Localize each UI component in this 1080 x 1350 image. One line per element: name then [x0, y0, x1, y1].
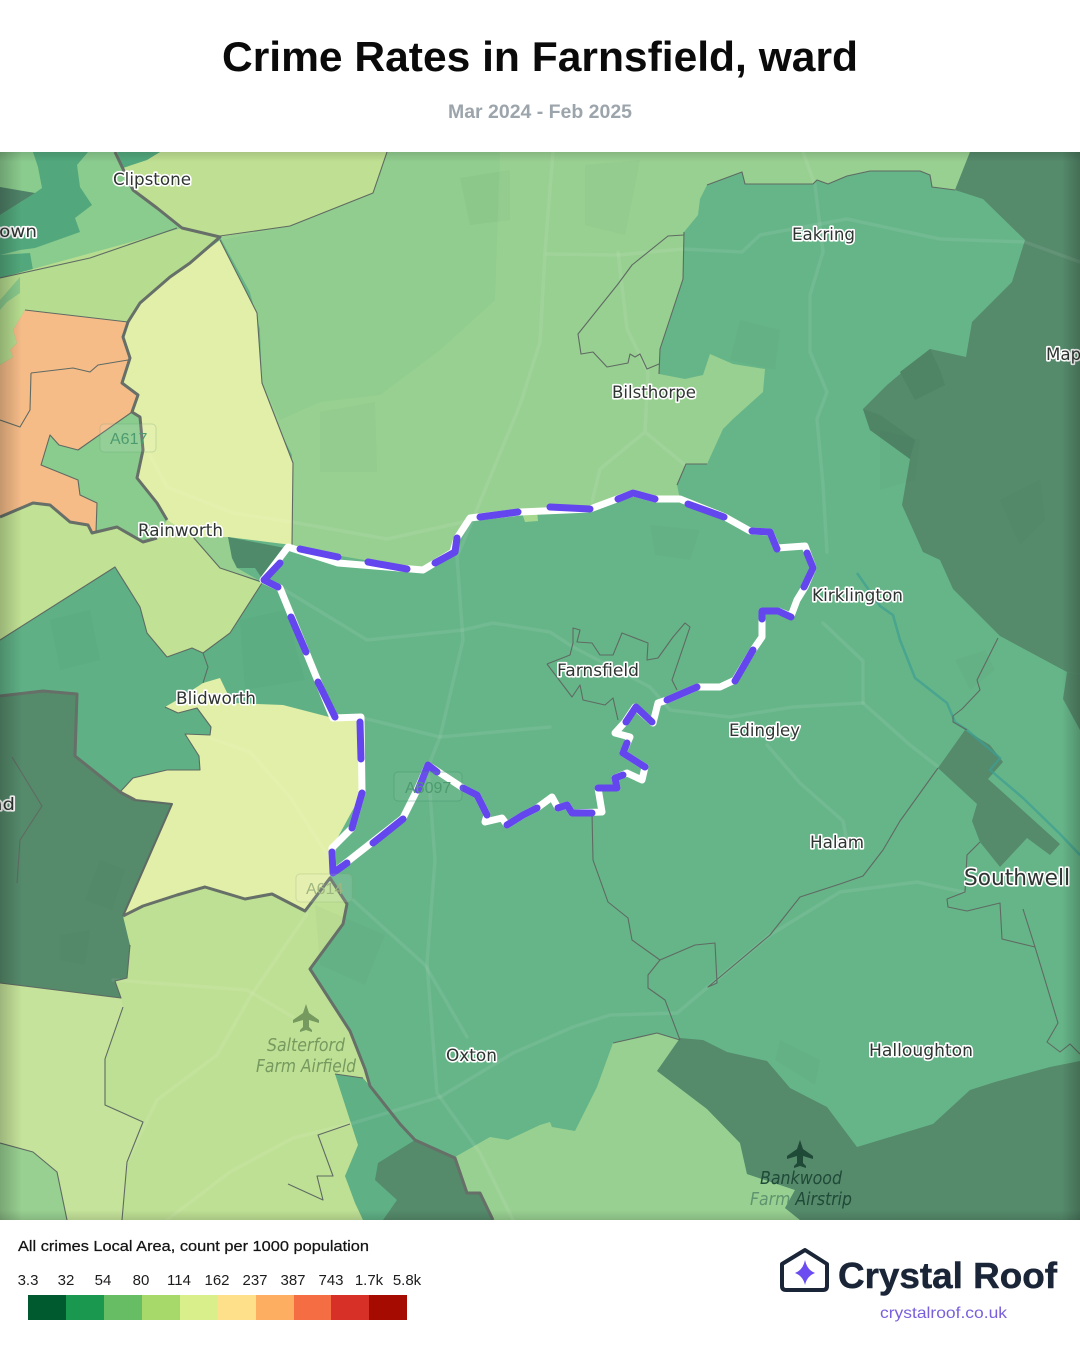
icon: house with star — [782, 1250, 827, 1290]
legend scale values — [18, 1272, 422, 1289]
small light plot on ward edge — [522, 514, 538, 522]
legend scale values: 387 — [280, 1272, 306, 1289]
place labels: Clipstone — [113, 170, 191, 190]
ward boundary: violet dashes — [264, 493, 813, 873]
place labels: Blidworth — [176, 689, 256, 709]
website URL: crystalroof.co.uk — [880, 1305, 1008, 1322]
place labels — [0, 170, 1080, 1066]
Crystal Roof logo — [782, 1250, 1058, 1322]
legend title: All crimes Local Area, count per 1000 population — [18, 1238, 369, 1255]
region: Clipstone yellow green — [115, 152, 387, 237]
region: green pocket beside A617 — [41, 412, 167, 542]
airfield label: Bankwood Farm Airstrip: Farm Airstrip — [750, 1189, 852, 1210]
region: south green wedge — [335, 1074, 399, 1220]
region: dark patch at Rainworth — [228, 537, 283, 577]
airfield label: Bankwood Farm Airstrip — [750, 1140, 852, 1210]
region: north central light green — [220, 152, 970, 570]
region: south central light green — [455, 1033, 800, 1220]
region: north-west dark triangle — [0, 187, 35, 215]
place labels: Rainworth — [138, 521, 223, 541]
place labels: Edingley — [729, 721, 800, 741]
region: south dark wedge — [375, 1140, 493, 1220]
legend scale values: 162 — [204, 1272, 230, 1289]
region: north-west green bands — [0, 152, 182, 278]
place labels: Eakring — [792, 225, 855, 245]
place labels: Oxton — [446, 1046, 497, 1066]
region: north-west pale green — [0, 228, 220, 365]
road label: A6097 — [394, 772, 462, 801]
legend scale values: 114 — [167, 1272, 191, 1289]
road label: A614 — [296, 874, 352, 902]
region: Blidworth pale yellow — [120, 678, 362, 916]
region: east sliver dark — [1063, 672, 1080, 730]
region boundaries — [0, 152, 1080, 1220]
road label: A617 — [100, 424, 156, 452]
airfield label: Salterford Farm Airfield: Salterford — [267, 1035, 345, 1056]
region: west pale green — [0, 503, 262, 657]
legend scale values: 54 — [95, 1272, 111, 1289]
legend scale values: 3.3 — [18, 1272, 38, 1289]
region: pocket south of Rainworth — [193, 537, 262, 582]
subtitle: date range: Mar 2024 - Feb 2025 — [448, 102, 632, 123]
roads — [113, 152, 1080, 1220]
field texture — [50, 160, 1045, 1085]
region: north central darker tint — [250, 293, 261, 352]
legend scale values: 80 — [133, 1272, 149, 1289]
airfield label: Salterford Farm Airfield: Farm Airfield — [256, 1056, 356, 1077]
place labels: Bilsthorpe — [612, 383, 696, 403]
region: orange high-crime area — [0, 310, 138, 532]
map base area: mid-green crime band — [0, 152, 1080, 1220]
choropleth map — [0, 152, 1080, 1220]
airfield label: Salterford Farm Airfield — [256, 1004, 356, 1077]
region: north-east dark — [863, 152, 1080, 674]
logo wordmark: Crystal Roof — [838, 1255, 1058, 1296]
legend scale values: 32 — [58, 1272, 74, 1289]
legend scale values: 743 — [318, 1272, 344, 1289]
legend — [18, 1238, 422, 1320]
legend scale values: 1.7k — [355, 1272, 384, 1289]
place labels: Halloughton — [869, 1041, 973, 1061]
legend scale values: 5.8k — [393, 1272, 422, 1289]
ward boundary: white base line — [263, 493, 813, 873]
road label: A617: A617 — [110, 431, 147, 448]
place labels: Farnsfield — [557, 661, 639, 681]
place labels: Halam — [810, 833, 864, 853]
place labels: Southwell — [964, 866, 1070, 891]
map edge shading — [0, 152, 1080, 1220]
region: south-west green by Blidworth — [0, 567, 333, 792]
road label: A614: A614 — [306, 881, 343, 898]
airfield label: Bankwood Farm Airstrip: Bankwood — [760, 1168, 842, 1189]
region: north-east darker patches — [863, 349, 930, 459]
region: dark patch near Southwell — [938, 730, 1060, 867]
region: south-west pale green — [106, 881, 368, 1220]
region: south-east dark — [657, 1038, 1080, 1220]
legend scale values: 237 — [242, 1272, 268, 1289]
place labels: Kirklington — [812, 586, 903, 606]
region: west dark high band — [0, 691, 172, 998]
region: Rainworth pale yellow — [122, 240, 293, 545]
title: Crime Rates in Farnsfield, ward — [222, 33, 858, 80]
river — [857, 573, 1080, 855]
Farnsfield village outline — [547, 623, 690, 720]
region: south-west corner green — [0, 1143, 67, 1220]
road label: A6097: A6097 — [405, 780, 451, 797]
legend colour swatches — [28, 1295, 407, 1320]
